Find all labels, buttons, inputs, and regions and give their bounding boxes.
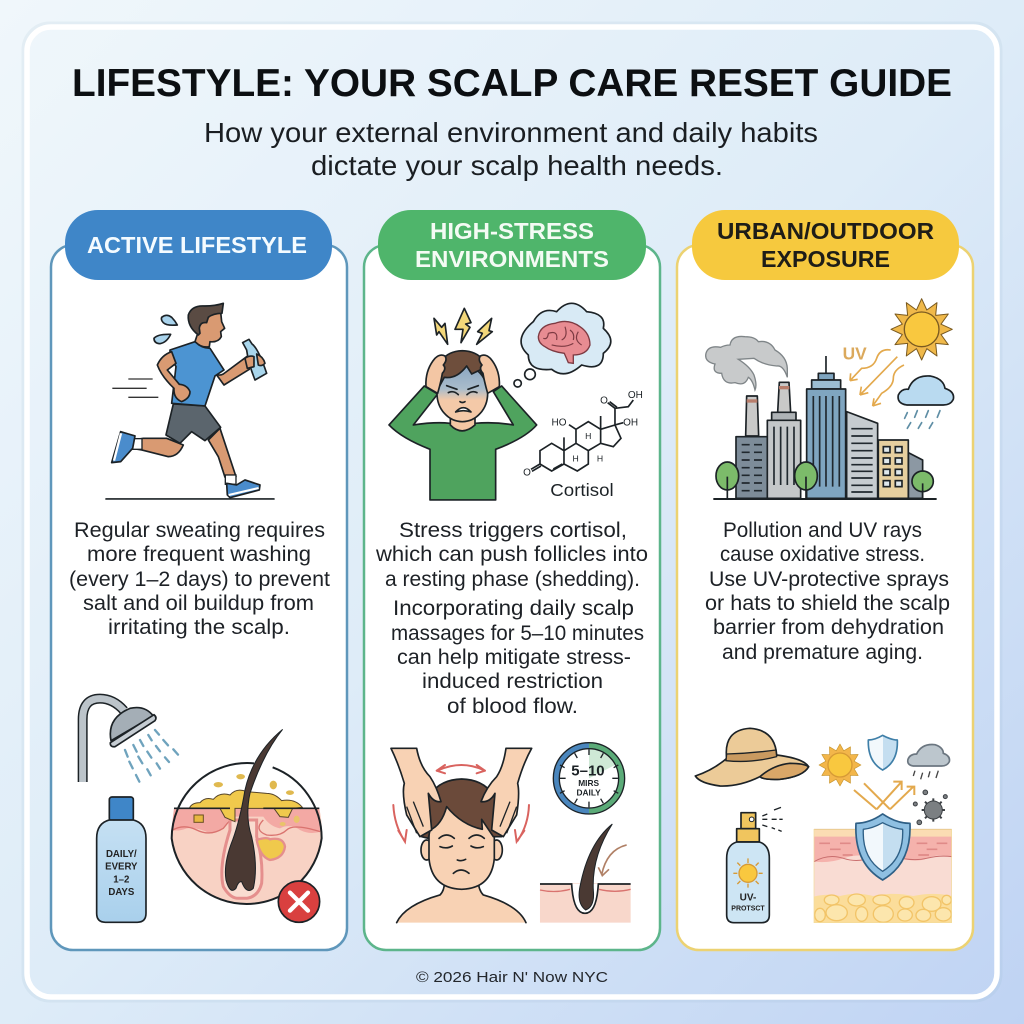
body text: which can push follicles into (375, 543, 648, 566)
panel card (364, 245, 660, 950)
buildings (736, 356, 923, 498)
icon: lightning bolts (434, 308, 492, 344)
icon: shampoo bottle: 1–2 (113, 875, 129, 886)
subtitle (204, 117, 818, 181)
chart: cortisol molecule: H (573, 454, 579, 464)
icon: rain cloud (898, 376, 954, 428)
body text: irritating the scalp. (108, 616, 290, 639)
body text: more frequent washing (87, 543, 311, 566)
icon: grey rain cloud (908, 745, 950, 779)
reflected rays (854, 782, 914, 809)
chart: cortisol molecule: OH (628, 390, 643, 401)
chart: cortisol molecule (523, 390, 643, 500)
body text: a resting phase (shedding). (385, 568, 640, 591)
chart: cortisol molecule: H (585, 431, 591, 441)
icon: UV spray bottle (727, 807, 783, 923)
icon: shampoo bottle: DAILY/ (106, 849, 137, 860)
icons: scalp massage, timer, follicle (391, 743, 631, 923)
icon: timer: MIRS (578, 778, 599, 788)
icons: shower, bottle, follicle (83, 699, 322, 922)
icon: stressed person (389, 303, 643, 500)
icons: hat, spray, protected skin (695, 728, 952, 923)
icon: sun hat (695, 728, 809, 786)
body text: cause oxidative stress. (720, 543, 925, 566)
panel card (677, 245, 973, 950)
pill heading: HIGH-STRESS (430, 218, 594, 244)
footer: © 2026 Hair N' Now NYC (416, 969, 608, 986)
panel: high-stress environments (364, 210, 660, 950)
icon: scalp massage (391, 748, 532, 923)
body text: Use UV-protective sprays (709, 568, 949, 591)
body text: or hats to shield the scalp (705, 592, 950, 615)
icon: shampoo bottle: EVERY (105, 862, 138, 873)
subtitle: How your external environment and daily habits (204, 117, 818, 148)
body text: induced restriction (422, 670, 603, 693)
chart: cortisol molecule: H (597, 454, 603, 464)
icon: city skyline with pollution and UV (706, 299, 954, 499)
panel: urban/outdoor exposure (677, 210, 973, 950)
icon: shampoo bottle (97, 797, 146, 922)
icon: sun (819, 744, 861, 786)
icon: UV spray bottle: UV- (740, 892, 756, 903)
pill heading: URBAN/OUTDOOR (717, 218, 934, 244)
body text: of blood flow. (447, 695, 578, 718)
body text: barrier from dehydration (713, 616, 944, 639)
icon: UV spray bottle: PROTSCT (731, 905, 765, 912)
icon: thought bubble (514, 303, 611, 387)
body text: Pollution and UV rays (723, 519, 922, 542)
body text: massages for 5–10 minutes (391, 622, 644, 645)
body text: Incorporating daily scalp (393, 597, 634, 620)
label: cortisol: Cortisol (550, 480, 614, 500)
chart: cortisol molecule: O (523, 468, 531, 479)
trees (716, 462, 933, 498)
body text (705, 519, 950, 664)
body text: Stress triggers cortisol, (399, 519, 627, 542)
icon: runner (106, 303, 274, 499)
panel: active lifestyle (51, 210, 347, 950)
icon: timer (553, 743, 625, 814)
UV label and rays (843, 343, 904, 406)
body text (375, 519, 648, 718)
chart: cortisol molecule: HO (551, 417, 567, 428)
icon: skin layers with shield (814, 814, 952, 923)
icon: pollutant particles (913, 790, 947, 825)
chart: cortisol molecule: O (600, 395, 608, 406)
body text: salt and oil buildup from (83, 592, 314, 615)
icon: shower (83, 699, 178, 782)
icon: small shield (868, 735, 897, 770)
chart: cortisol molecule: OH (623, 417, 638, 428)
pill heading: ENVIRONMENTS (415, 246, 609, 272)
icon: clogged follicle (171, 729, 322, 922)
icon: sun (891, 299, 952, 360)
icon: shampoo bottle: DAYS (108, 887, 135, 898)
panel card (51, 245, 347, 950)
UV label and rays: UV (843, 343, 867, 363)
body text: can help mitigate stress- (397, 646, 631, 669)
body text: and premature aging. (722, 641, 923, 664)
icon: resting follicle (540, 824, 631, 923)
pill heading: EXPOSURE (761, 246, 890, 272)
body text (69, 519, 330, 639)
smoke (706, 336, 787, 390)
pill heading: ACTIVE LIFESTYLE (87, 232, 307, 258)
title: LIFESTYLE: YOUR SCALP CARE RESET GUIDE (72, 62, 952, 105)
icon: timer: 5–10 (571, 762, 605, 779)
pill heading (378, 210, 646, 280)
body text: Regular sweating requires (74, 519, 325, 542)
pill heading (692, 210, 959, 280)
pill heading (65, 210, 332, 280)
icon: timer: DAILY (577, 788, 601, 798)
body text: (every 1–2 days) to prevent (69, 568, 330, 591)
subtitle: dictate your scalp health needs. (311, 150, 723, 181)
